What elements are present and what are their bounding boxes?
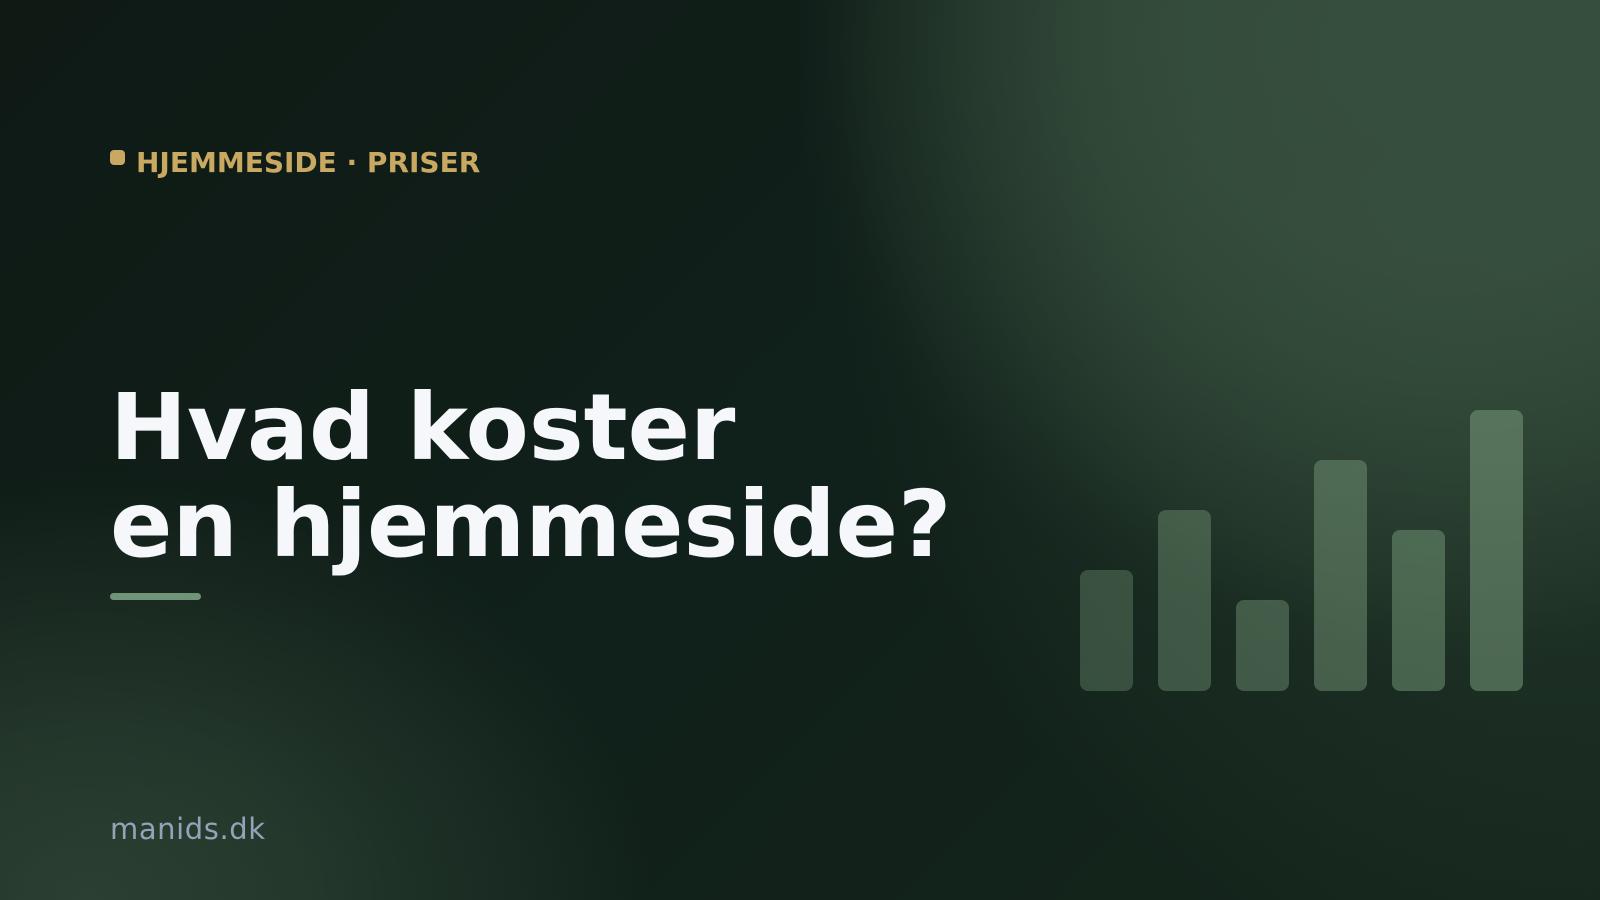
bar 1 (1080, 570, 1133, 691)
bar 6 (1470, 410, 1523, 691)
title underline accent (110, 593, 201, 600)
eyebrow text: HJEMMESIDE · PRISER (136, 146, 480, 179)
bar 5 (1392, 530, 1445, 691)
bar 4 (1314, 460, 1367, 691)
bar chart decoration (1080, 410, 1523, 691)
bar 3 (1236, 600, 1289, 691)
title (110, 374, 951, 578)
icon: gold dot (110, 150, 125, 165)
site name: manids.dk (110, 812, 266, 846)
title: en hjemmeside? (110, 471, 951, 578)
title: Hvad koster (110, 374, 735, 481)
bar 2 (1158, 510, 1211, 691)
eyebrow label (110, 146, 480, 179)
